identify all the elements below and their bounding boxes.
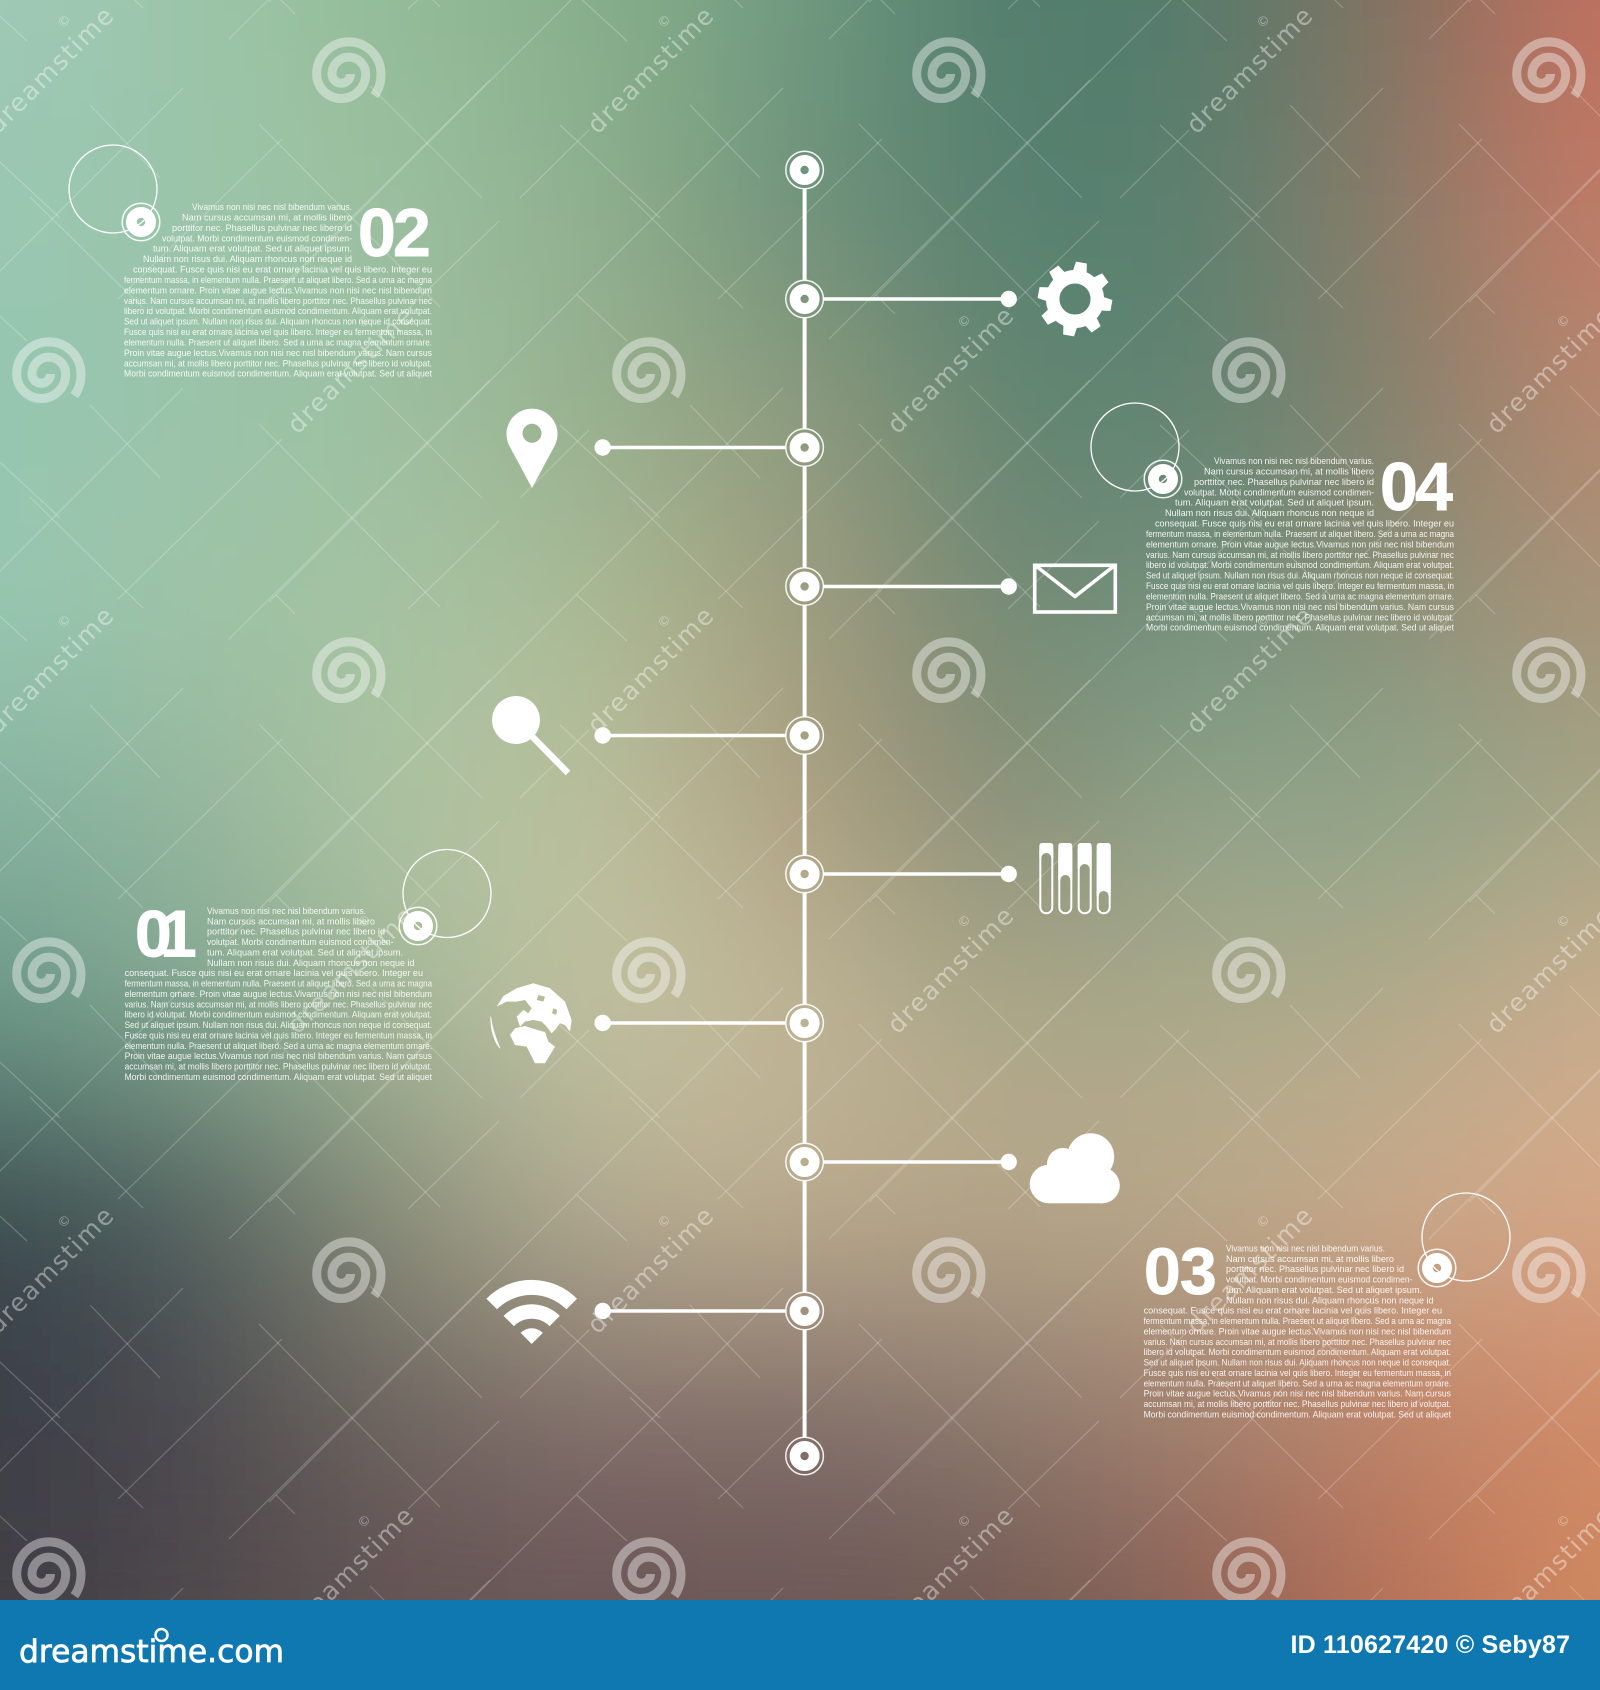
text block 03: varius. Nam cursus accumsan mi, at mollis libero porttitor nec. Phasellus pulvinar nec: [1144, 1337, 1451, 1347]
text block 01: consequat. Fusce quis nisi eu erat ornare lacinia vel quis libero. Integer eu: [125, 968, 423, 978]
text block 04: fermentum massa, in elementum nulla. Praesent ut aliquet libero. Sed a urna ac magna: [1146, 529, 1455, 539]
text block 01: libero id volutpat. Morbi condimentum euismod condimentum. Aliquam erat volutpat.: [125, 1010, 432, 1020]
text block 04: tum. Aliquam erat volutpat. Sed ut aliquet ipsum.: [1175, 498, 1374, 508]
watermark layer: crossing lines, spirals and dreamstime wordmarks: dreamstime: [581, 601, 719, 739]
text block 04: Morbi condimentum euismod condimentum. Aliquam erat volutpat. Sed ut aliquet: [1146, 623, 1454, 633]
left connectors: [594, 439, 786, 1319]
watermark layer: crossing lines, spirals and dreamstime wordmarks: dreamstime: [581, 1, 719, 139]
text block 03: accumsan mi, at mollis libero porttitor nec. Phasellus pulvinar nec libero id volutpat.: [1144, 1399, 1451, 1409]
watermark layer: crossing lines, spirals and dreamstime wordmarks: ©: [955, 1512, 975, 1532]
number 02: 02: [358, 195, 431, 271]
text block 02: [124, 202, 433, 379]
watermark layer: crossing lines, spirals and dreamstime wordmarks: ©: [355, 312, 375, 332]
text block 03: consequat. Fusce quis nisi eu erat ornare lacinia vel quis libero. Integer eu: [1144, 1306, 1442, 1316]
watermark layer: crossing lines, spirals and dreamstime wordmarks: ©: [655, 612, 675, 632]
text block 04: elementum nulla. Praesent ut aliquet libero. Sed a urna ac magna elementum ornare.: [1146, 592, 1454, 602]
text block 04: Nam cursus accumsan mi, at mollis libero: [1204, 466, 1374, 476]
text block 01: fermentum massa, in elementum nulla. Praesent ut aliquet libero. Sed a urna ac magna: [125, 979, 433, 989]
text block 03: fermentum massa, in elementum nulla. Praesent ut aliquet libero. Sed a urna ac magna: [1144, 1316, 1452, 1326]
watermark layer: crossing lines, spirals and dreamstime wordmarks: ©: [1554, 312, 1574, 332]
watermark layer: crossing lines, spirals and dreamstime wordmarks: ©: [955, 912, 975, 932]
text block 03: Fusce quis nisi eu erat ornare lacinia vel quis libero. Integer eu fermentum massa, in: [1144, 1368, 1451, 1378]
icon: globe: [491, 983, 572, 1063]
text block 01: accumsan mi, at mollis libero porttitor nec. Phasellus pulvinar nec libero id volutpat.: [125, 1062, 432, 1072]
watermark layer: crossing lines, spirals and dreamstime wordmarks: ©: [55, 12, 75, 32]
text block 02: tum. Aliquam erat volutpat. Sed ut aliquet ipsum.: [153, 244, 352, 254]
text block 01: Morbi condimentum euismod condimentum. Aliquam erat volutpat. Sed ut aliquet: [125, 1072, 432, 1082]
panel: 02: [69, 145, 433, 379]
text block 02: Nullam non risus dui. Aliquam rhoncus non neque id: [143, 254, 352, 264]
watermark layer: crossing lines, spirals and dreamstime wordmarks: dreamstime: [1180, 1201, 1318, 1339]
panel: 03: [1144, 1193, 1510, 1419]
watermark layer: crossing lines, spirals and dreamstime wordmarks: ©: [55, 1212, 75, 1232]
icon: wifi: [492, 1287, 572, 1344]
text block 03: elementum nulla. Praesent ut aliquet libero. Sed a urna ac magna elementum ornare.: [1144, 1378, 1451, 1388]
text block 03: Sed ut aliquet ipsum. Nullam non risus dui. Aliquam rhoncus non neque id consequat.: [1144, 1358, 1451, 1368]
watermark layer: crossing lines, spirals and dreamstime wordmarks: ©: [1254, 12, 1274, 32]
text block 02: elementum ornare. Proin vitae augue lectus.Vivamus non nisi nec nisl bibendum: [124, 285, 432, 295]
text block 02: libero id volutpat. Morbi condimentum euismod condimentum. Aliquam erat volutpat.: [124, 306, 432, 316]
icon: gear: [1037, 261, 1113, 337]
text block 01: Nullam non risus dui. Aliquam rhoncus non neque id: [207, 958, 414, 968]
watermark layer: crossing lines, spirals and dreamstime wordmarks: dreamstime: [281, 1501, 419, 1639]
watermark layer: crossing lines, spirals and dreamstime wordmarks: dreamstime: [581, 1201, 719, 1339]
text block 03: Morbi condimentum euismod condimentum. Aliquam erat volutpat. Sed ut aliquet: [1144, 1409, 1451, 1419]
panel: 01: [125, 850, 491, 1082]
watermark layer: crossing lines, spirals and dreamstime wordmarks: ©: [1554, 1512, 1574, 1532]
text block 03: Nullam non risus dui. Aliquam rhoncus non neque id: [1226, 1295, 1434, 1305]
text block 01: elementum ornare. Proin vitae augue lectus.Vivamus non nisi nec nisl bibendum: [125, 989, 432, 999]
watermark layer: crossing lines, spirals and dreamstime wordmarks: ©: [1254, 1212, 1274, 1232]
text block 01: Fusce quis nisi eu erat ornare lacinia vel quis libero. Integer eu fermentum massa, in: [125, 1030, 432, 1040]
number 04: 04: [1380, 449, 1453, 525]
text block 02: Fusce quis nisi eu erat ornare lacinia vel quis libero. Integer eu fermentum massa, in: [124, 327, 432, 337]
text block 04: Vivamus non nisi nec nisl bibendum varius.: [1214, 456, 1374, 466]
watermark layer: crossing lines, spirals and dreamstime wordmarks: ©: [955, 312, 975, 332]
icon: map pin: [507, 409, 558, 488]
text block 02: fermentum massa, in elementum nulla. Praesent ut aliquet libero. Sed a urna ac magna: [124, 275, 433, 285]
footer image id: ID 110627420 © Seby87: [1290, 1631, 1570, 1659]
watermark layer: crossing lines, spirals and dreamstime wordmarks: ©: [55, 612, 75, 632]
text block 01: Nam cursus accumsan mi, at mollis libero: [207, 916, 375, 926]
text block 04: libero id volutpat. Morbi condimentum euismod condimentum. Aliquam erat volutpat.: [1146, 560, 1454, 570]
watermark layer: crossing lines, spirals and dreamstime wordmarks: ©: [1254, 612, 1274, 632]
marker circles 04: [1091, 403, 1182, 498]
text block 01: porttitor nec. Phasellus pulvinar nec libero id: [207, 927, 385, 937]
icon: cloud: [1030, 1133, 1120, 1203]
text block 03: libero id volutpat. Morbi condimentum euismod condimentum. Aliquam erat volutpat.: [1144, 1347, 1451, 1357]
text block 03: volutpat. Morbi condimentum euismod condimen-: [1226, 1275, 1412, 1285]
text block 04: porttitor nec. Phasellus pulvinar nec libero id: [1194, 477, 1374, 487]
text block 03: tum. Aliquam erat volutpat. Sed ut aliquet ipsum.: [1226, 1285, 1422, 1295]
text block 02: accumsan mi, at mollis libero porttitor nec. Phasellus pulvinar nec libero id volutpat.: [124, 358, 432, 368]
spine segments: [803, 189, 807, 1437]
number 01: 01: [135, 896, 197, 970]
text block 03: [1144, 1244, 1452, 1419]
text block 01: Vivamus non nisi nec nisl bibendum varius.: [207, 906, 366, 916]
text block 02: Morbi condimentum euismod condimentum. Aliquam erat volutpat. Sed ut aliquet: [124, 369, 432, 379]
text block 04: accumsan mi, at mollis libero porttitor nec. Phasellus pulvinar nec libero id volutpat.: [1146, 612, 1454, 622]
text block 02: porttitor nec. Phasellus pulvinar nec libero id: [172, 223, 352, 233]
text block 01: tum. Aliquam erat volutpat. Sed ut aliquet ipsum.: [207, 948, 403, 958]
text block 04: Sed ut aliquet ipsum. Nullam non risus dui. Aliquam rhoncus non neque id consequat.: [1146, 571, 1454, 581]
watermark layer: crossing lines, spirals and dreamstime wordmarks: ©: [1554, 912, 1574, 932]
text block 02: Nam cursus accumsan mi, at mollis libero: [182, 212, 352, 222]
watermark layer: crossing lines, spirals and dreamstime wordmarks: dreamstime: [881, 1501, 1019, 1639]
text block 04: Nullam non risus dui. Aliquam rhoncus non neque id: [1165, 508, 1374, 518]
watermark layer: crossing lines, spirals and dreamstime wordmarks: ©: [355, 912, 375, 932]
footer bar: [0, 1600, 1600, 1690]
text block 03: Nam cursus accumsan mi, at mollis libero: [1226, 1254, 1394, 1264]
text block 02: Vivamus non nisi nec nisl bibendum varius.: [192, 202, 352, 212]
nodes: [786, 151, 823, 1475]
text block 02: volutpat. Morbi condimentum euismod condimen-: [162, 233, 352, 243]
text block 03: elementum ornare. Proin vitae augue lectus.Vivamus non nisi nec nisl bibendum: [1144, 1326, 1451, 1336]
text block 01: Proin vitae augue lectus.Vivamus non nisi nec nisl bibendum varius. Nam cursus: [125, 1051, 432, 1061]
marker circles 03: [1418, 1193, 1510, 1287]
text block 02: varius. Nam cursus accumsan mi, at mollis libero porttitor nec. Phasellus pulvinar nec: [124, 296, 432, 306]
icon: test tube bars: [1039, 843, 1111, 913]
text block 02: Proin vitae augue lectus.Vivamus non nisi nec nisl bibendum varius. Nam cursus: [124, 348, 432, 358]
watermark layer: crossing lines, spirals and dreamstime wordmarks: dreamstime: [281, 901, 419, 1039]
text block 01: [125, 906, 433, 1082]
text block 01: elementum nulla. Praesent ut aliquet libero. Sed a urna ac magna elementum ornare.: [125, 1041, 432, 1051]
watermark layer: crossing lines, spirals and dreamstime wordmarks: dreamstime: [881, 901, 1019, 1039]
marker circles 02: [69, 145, 160, 241]
timeline: vertical spine with nodes and connectors: [594, 151, 1017, 1475]
text block 02: consequat. Fusce quis nisi eu erat ornare lacinia vel quis libero. Integer eu: [133, 264, 432, 274]
watermark layer: crossing lines, spirals and dreamstime wordmarks: ©: [655, 12, 675, 32]
text block 04: [1146, 456, 1455, 633]
text block 01: volutpat. Morbi condimentum euismod condimen-: [207, 937, 394, 947]
watermark layer: crossing lines, spirals and dreamstime wordmarks: dreamstime: [281, 301, 419, 439]
footer logo: dreamstime.com: [19, 1634, 284, 1670]
watermark layer: crossing lines, spirals and dreamstime wordmarks: ©: [355, 1512, 375, 1532]
text block 04: Fusce quis nisi eu erat ornare lacinia vel quis libero. Integer eu fermentum massa, in: [1146, 581, 1454, 591]
text block 01: Sed ut aliquet ipsum. Nullam non risus dui. Aliquam rhoncus non neque id consequat.: [125, 1020, 432, 1030]
watermark layer: crossing lines, spirals and dreamstime wordmarks: dreamstime: [1180, 601, 1318, 739]
number 03: 03: [1144, 1234, 1217, 1308]
text block 03: porttitor nec. Phasellus pulvinar nec libero id: [1226, 1264, 1404, 1274]
text block 03: Proin vitae augue lectus.Vivamus non nisi nec nisl bibendum varius. Nam cursus: [1144, 1389, 1451, 1399]
text block 04: varius. Nam cursus accumsan mi, at mollis libero porttitor nec. Phasellus pulvinar nec: [1146, 550, 1454, 560]
text block 02: elementum nulla. Praesent ut aliquet libero. Sed a urna ac magna elementum ornare.: [124, 338, 432, 348]
text block 04: consequat. Fusce quis nisi eu erat ornare lacinia vel quis libero. Integer eu: [1155, 518, 1454, 528]
text block 04: elementum ornare. Proin vitae augue lectus.Vivamus non nisi nec nisl bibendum: [1146, 539, 1454, 549]
panel: 04: [1091, 403, 1455, 633]
text block 04: Proin vitae augue lectus.Vivamus non nisi nec nisl bibendum varius. Nam cursus: [1146, 602, 1454, 612]
watermark layer: crossing lines, spirals and dreamstime wordmarks: dreamstime: [881, 301, 1019, 439]
icon: envelope: [1035, 565, 1115, 612]
right connectors: [823, 291, 1017, 1170]
watermark layer: crossing lines, spirals and dreamstime wordmarks: dreamstime: [1180, 1, 1318, 139]
text block 04: volutpat. Morbi condimentum euismod condimen-: [1184, 487, 1374, 497]
marker circles 01: [399, 850, 491, 945]
icon: magnifier: [492, 696, 568, 773]
watermark layer: crossing lines, spirals and dreamstime wordmarks: ©: [655, 1212, 675, 1232]
text block 02: Sed ut aliquet ipsum. Nullam non risus dui. Aliquam rhoncus non neque id consequat.: [124, 317, 432, 327]
text block 01: varius. Nam cursus accumsan mi, at mollis libero porttitor nec. Phasellus pulvinar nec: [125, 999, 432, 1009]
text block 03: Vivamus non nisi nec nisl bibendum varius.: [1226, 1244, 1385, 1254]
